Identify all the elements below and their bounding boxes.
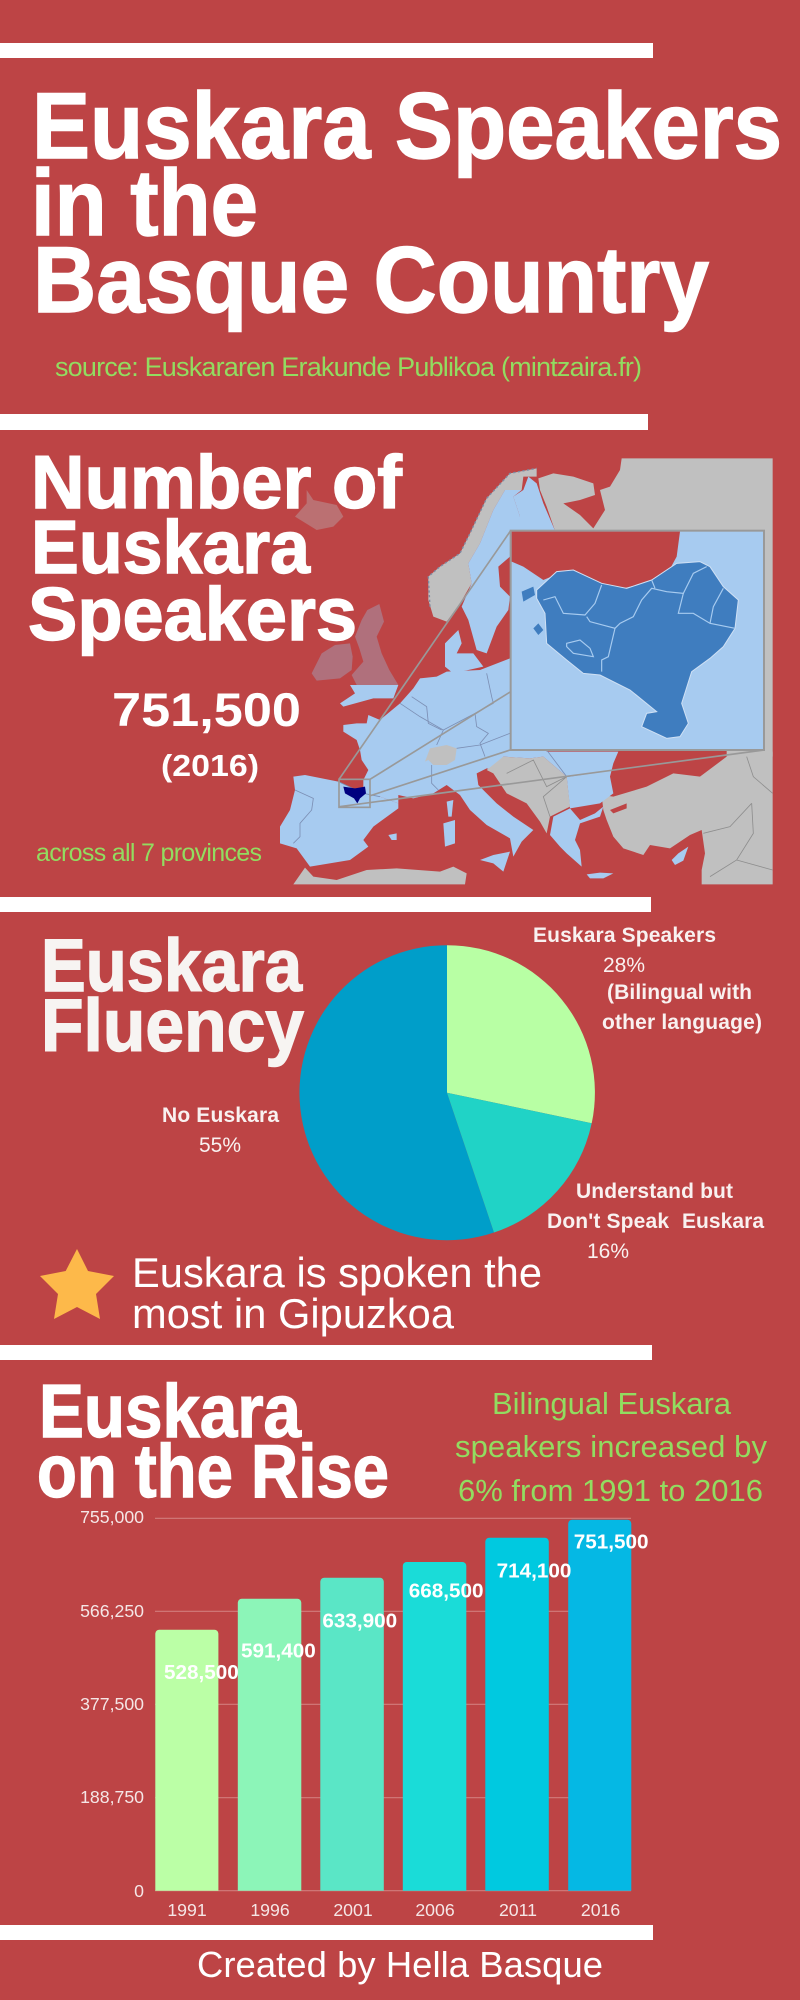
value labels <box>164 1530 648 1684</box>
heading: fluency <box>41 924 304 1067</box>
north-east gray land <box>538 458 773 757</box>
note: provinces: across all 7 provinces <box>36 839 262 867</box>
locator heart: Basque Country <box>343 787 366 803</box>
bar 2016 <box>568 1520 631 1891</box>
pie label: understand: Understand but <box>576 1180 733 1203</box>
callout: bilingual increase: Bilingual Euskara <box>492 1386 732 1421</box>
Balkans <box>487 757 570 833</box>
stat: 751,500: 751,500 <box>112 683 301 736</box>
x axis labels: 2006 <box>415 1900 455 1920</box>
slice: no Euskara <box>299 945 494 1240</box>
bar chart <box>80 1507 648 1920</box>
title: Basque Country <box>33 227 709 332</box>
slice: Euskara speakers <box>447 945 595 1123</box>
Norway <box>428 468 537 622</box>
Great Britain <box>352 604 398 685</box>
slice: understand <box>447 1093 592 1232</box>
bar 2001 <box>320 1578 384 1891</box>
value labels: 751,500 <box>574 1530 648 1553</box>
y axis labels: 377,500 <box>80 1694 144 1714</box>
Iceland <box>295 490 343 530</box>
callout: Gipuzkoa <box>132 1249 542 1337</box>
heading: fluency: Fluency <box>41 984 304 1067</box>
y axis labels: 566,250 <box>80 1601 144 1621</box>
value labels: 633,900 <box>322 1610 397 1633</box>
pie label: no Euskara: No Euskara <box>162 1104 279 1127</box>
y axis labels: 755,000 <box>80 1507 144 1527</box>
pie label: Euskara speakers <box>533 924 762 1034</box>
icon: star <box>40 1249 114 1319</box>
southern England <box>340 685 398 707</box>
Denmark <box>445 630 483 673</box>
pie label: Euskara speakers: 28% <box>603 954 645 977</box>
bar 1991 <box>155 1630 218 1891</box>
heading: on the rise: Euskara <box>39 1369 302 1453</box>
pie label: understand: Euskara <box>682 1210 764 1233</box>
heading: on the rise <box>37 1369 389 1513</box>
value labels: 668,500 <box>409 1580 483 1603</box>
inset panel <box>511 531 764 750</box>
national borders <box>293 673 773 877</box>
x axis labels <box>167 1900 620 1920</box>
callout: bilingual increase: 6% from 1991 to 2016 <box>458 1473 763 1508</box>
pie label: no Euskara <box>162 1104 279 1157</box>
heading: number of speakers: Speakers <box>28 572 357 656</box>
title <box>31 73 782 332</box>
pie label: understand: Don't Speak <box>547 1210 669 1233</box>
y axis labels <box>80 1507 144 1901</box>
callout: bilingual increase <box>455 1386 768 1508</box>
pie label: no Euskara: 55% <box>199 1134 241 1157</box>
x axis labels: 2016 <box>581 1900 620 1920</box>
pie label: understand: 16% <box>587 1240 629 1263</box>
heading: number of speakers <box>28 440 403 656</box>
Switzerland <box>425 745 457 765</box>
inset connector lines <box>339 531 764 807</box>
pie label: Euskara speakers: Euskara Speakers <box>533 924 716 947</box>
heading: number of speakers: Euskara <box>31 505 311 589</box>
value labels: 591,400 <box>241 1640 316 1663</box>
x axis labels: 1991 <box>167 1900 207 1920</box>
callout: Gipuzkoa: Euskara is spoken the <box>132 1249 542 1296</box>
pie chart <box>299 945 595 1240</box>
heading: on the rise: on the Rise <box>37 1429 389 1513</box>
Mediterranean islands <box>388 800 688 878</box>
Finland <box>513 477 555 531</box>
heading: fluency: Euskara <box>41 924 303 1007</box>
province borders <box>543 567 735 672</box>
callout: Gipuzkoa: most in Gipuzkoa <box>132 1290 455 1337</box>
bar 2011 <box>485 1538 549 1891</box>
bar 2006 <box>403 1562 466 1891</box>
mainland Europe and Italy <box>343 658 618 857</box>
locator box <box>339 779 370 807</box>
pie label: understand <box>547 1180 764 1263</box>
source note: source: Euskararen Erakunde Publikoa (mintzaira.fr) <box>55 352 642 382</box>
map: Europe with Basque Country inset <box>280 458 773 884</box>
Norway coast detail <box>428 468 537 607</box>
Sea of Marmara <box>610 803 627 813</box>
stat year: (2016) <box>161 748 259 783</box>
y axis labels: 0 <box>134 1881 144 1901</box>
Greece <box>550 807 603 867</box>
Spain and Portugal <box>280 775 398 867</box>
value labels: 528,500 <box>164 1661 239 1684</box>
inset sea <box>512 532 680 588</box>
callout: bilingual increase: speakers increased by <box>455 1429 768 1464</box>
y axis labels: 188,750 <box>80 1787 144 1807</box>
Turkey and Middle East <box>602 752 773 884</box>
x axis labels: 2011 <box>499 1900 537 1920</box>
Ireland <box>312 643 353 681</box>
x axis labels: 2001 <box>333 1900 373 1920</box>
x axis labels: 1996 <box>250 1900 290 1920</box>
title: in the <box>31 150 258 255</box>
North Africa <box>293 867 467 884</box>
pie label: Euskara speakers: (Bilingual with <box>607 981 752 1004</box>
bar 1996 <box>238 1599 301 1891</box>
pie label: Euskara speakers: other language) <box>602 1011 762 1034</box>
Sweden <box>462 490 523 653</box>
credit: Created by Hella Basque <box>197 1944 603 1985</box>
heading: number of speakers: Number of <box>31 440 403 524</box>
Basque Country shape <box>537 562 738 738</box>
value labels: 714,100 <box>497 1560 571 1583</box>
enclaves <box>522 587 543 635</box>
